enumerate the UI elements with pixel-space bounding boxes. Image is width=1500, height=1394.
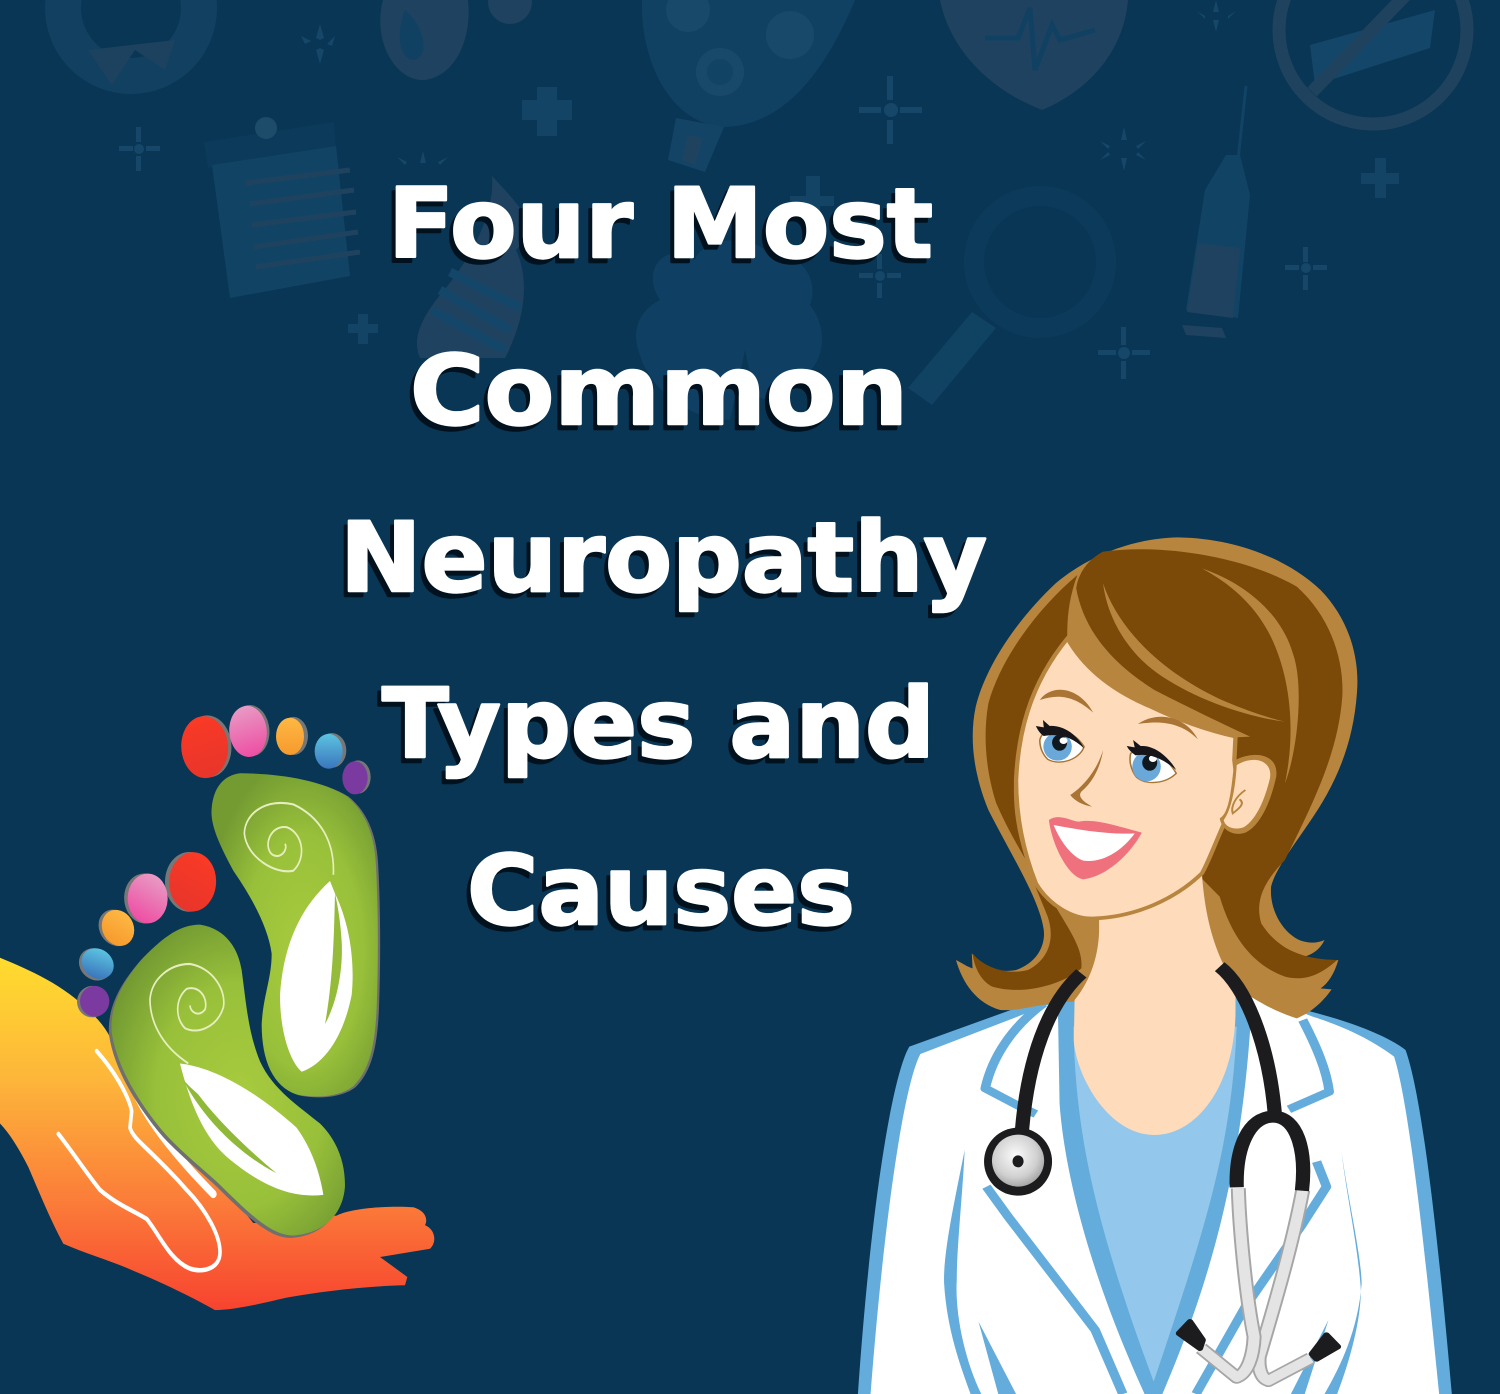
title: Neuropathy	[340, 502, 987, 614]
face	[1016, 638, 1241, 918]
hair and face	[956, 537, 1357, 1135]
icon: magnifier	[908, 196, 1106, 405]
icon: glucose meter	[642, 0, 855, 172]
upper foot	[211, 773, 380, 1097]
ear	[1220, 755, 1276, 834]
nose	[1070, 750, 1103, 807]
hair dark left	[973, 575, 1082, 990]
hair highlights	[1067, 568, 1299, 783]
icon: dotted sparkles	[119, 0, 1327, 379]
lower foot	[109, 925, 345, 1238]
coat	[858, 977, 1452, 1394]
icon: donut	[63, 0, 199, 85]
title: Common	[410, 335, 908, 447]
toes lower foot	[76, 842, 224, 1017]
icon: dna strand	[417, 176, 535, 358]
silver tubes	[1201, 1188, 1311, 1381]
coat seams	[944, 1150, 1362, 1394]
coat and scrubs	[858, 977, 1452, 1394]
hand outline strokes	[58, 1051, 220, 1270]
hair outer	[956, 537, 1357, 1018]
stethoscope	[984, 967, 1338, 1381]
icon: no cake sign	[1279, 0, 1467, 124]
mouth	[1049, 817, 1142, 879]
eyebrows	[1040, 690, 1198, 739]
lower hair strand	[1219, 897, 1253, 973]
title: Types and	[382, 668, 935, 780]
ear tips	[1179, 1322, 1338, 1359]
icon: plus signs	[348, 87, 1399, 344]
icon: kidney and drop	[380, 0, 532, 80]
coat white body	[871, 990, 1439, 1394]
title: Causes	[467, 835, 855, 947]
faint medical icons pattern	[63, 0, 1467, 420]
illustration: smiling doctor	[858, 537, 1452, 1394]
icon: heart shield	[940, 0, 1128, 110]
icon: brain cloud	[636, 240, 822, 420]
left eye	[1036, 720, 1084, 762]
icon: syringe	[1182, 86, 1250, 338]
lapels	[985, 1003, 1329, 1394]
scrubs light fill	[1073, 1027, 1237, 1382]
neck	[1074, 873, 1236, 1135]
hair dark	[1076, 549, 1342, 978]
headset arch	[1237, 1117, 1303, 1191]
illustration: hand holding feet	[0, 700, 434, 1310]
chest piece	[984, 1128, 1052, 1196]
title: Four Most	[388, 168, 933, 280]
title	[340, 168, 987, 947]
right eye	[1127, 740, 1176, 783]
icon: clipboard	[204, 117, 360, 298]
tubing	[1022, 967, 1275, 1130]
hand	[0, 958, 434, 1310]
toes upper foot	[176, 700, 371, 794]
scrubs	[1058, 980, 1251, 1394]
